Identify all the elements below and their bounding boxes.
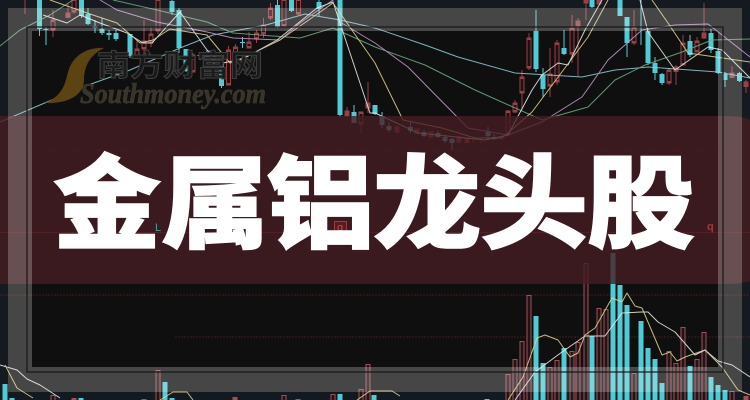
title band [0,116,750,284]
red candle wicks [25,0,746,143]
red volume bars [53,263,746,400]
marker q: q [707,221,714,233]
right yellow volume line [508,293,750,400]
white average, second section [640,0,750,78]
watermark logo [45,41,266,110]
watermark swoosh [45,48,104,103]
green average [0,0,73,46]
title: 属 [161,123,269,270]
green average, second section [113,0,750,120]
cyan candle wicks [40,0,740,150]
pink average, second section [340,22,750,135]
marker L: L [302,222,308,234]
watermark chinese name: 南方财富网 [97,41,263,85]
right white volume line [515,312,750,400]
watermark url: Southmoney.com [80,79,266,110]
cyan volume bars [5,253,725,400]
teal long-term average [0,14,750,122]
marker q [334,222,346,234]
marker L: L [155,222,161,234]
title: 头 [480,123,588,270]
title: 龙 [373,123,481,270]
volume average lines [0,293,750,400]
yellow volume line [357,391,400,400]
candlestick chart [25,0,746,150]
white average [43,0,602,140]
cyan candle bodies [40,0,740,143]
yellow average [50,0,608,138]
marker L: L [85,222,91,234]
title: 铝 [267,123,375,270]
left yellow volume line [5,365,33,398]
moving average lines [0,0,750,140]
red candle bodies [53,0,746,140]
yellow average, second section [652,0,750,62]
title: 金 [53,123,161,270]
volume bars [5,253,746,400]
title: 股 [587,123,695,270]
left white volume line [0,365,60,398]
pink average [100,0,333,40]
title [53,123,695,270]
chart letter markers [85,221,714,234]
marker q: q [337,222,343,234]
middle yellow volume line [160,392,193,400]
red volume bar interiors [53,264,732,400]
